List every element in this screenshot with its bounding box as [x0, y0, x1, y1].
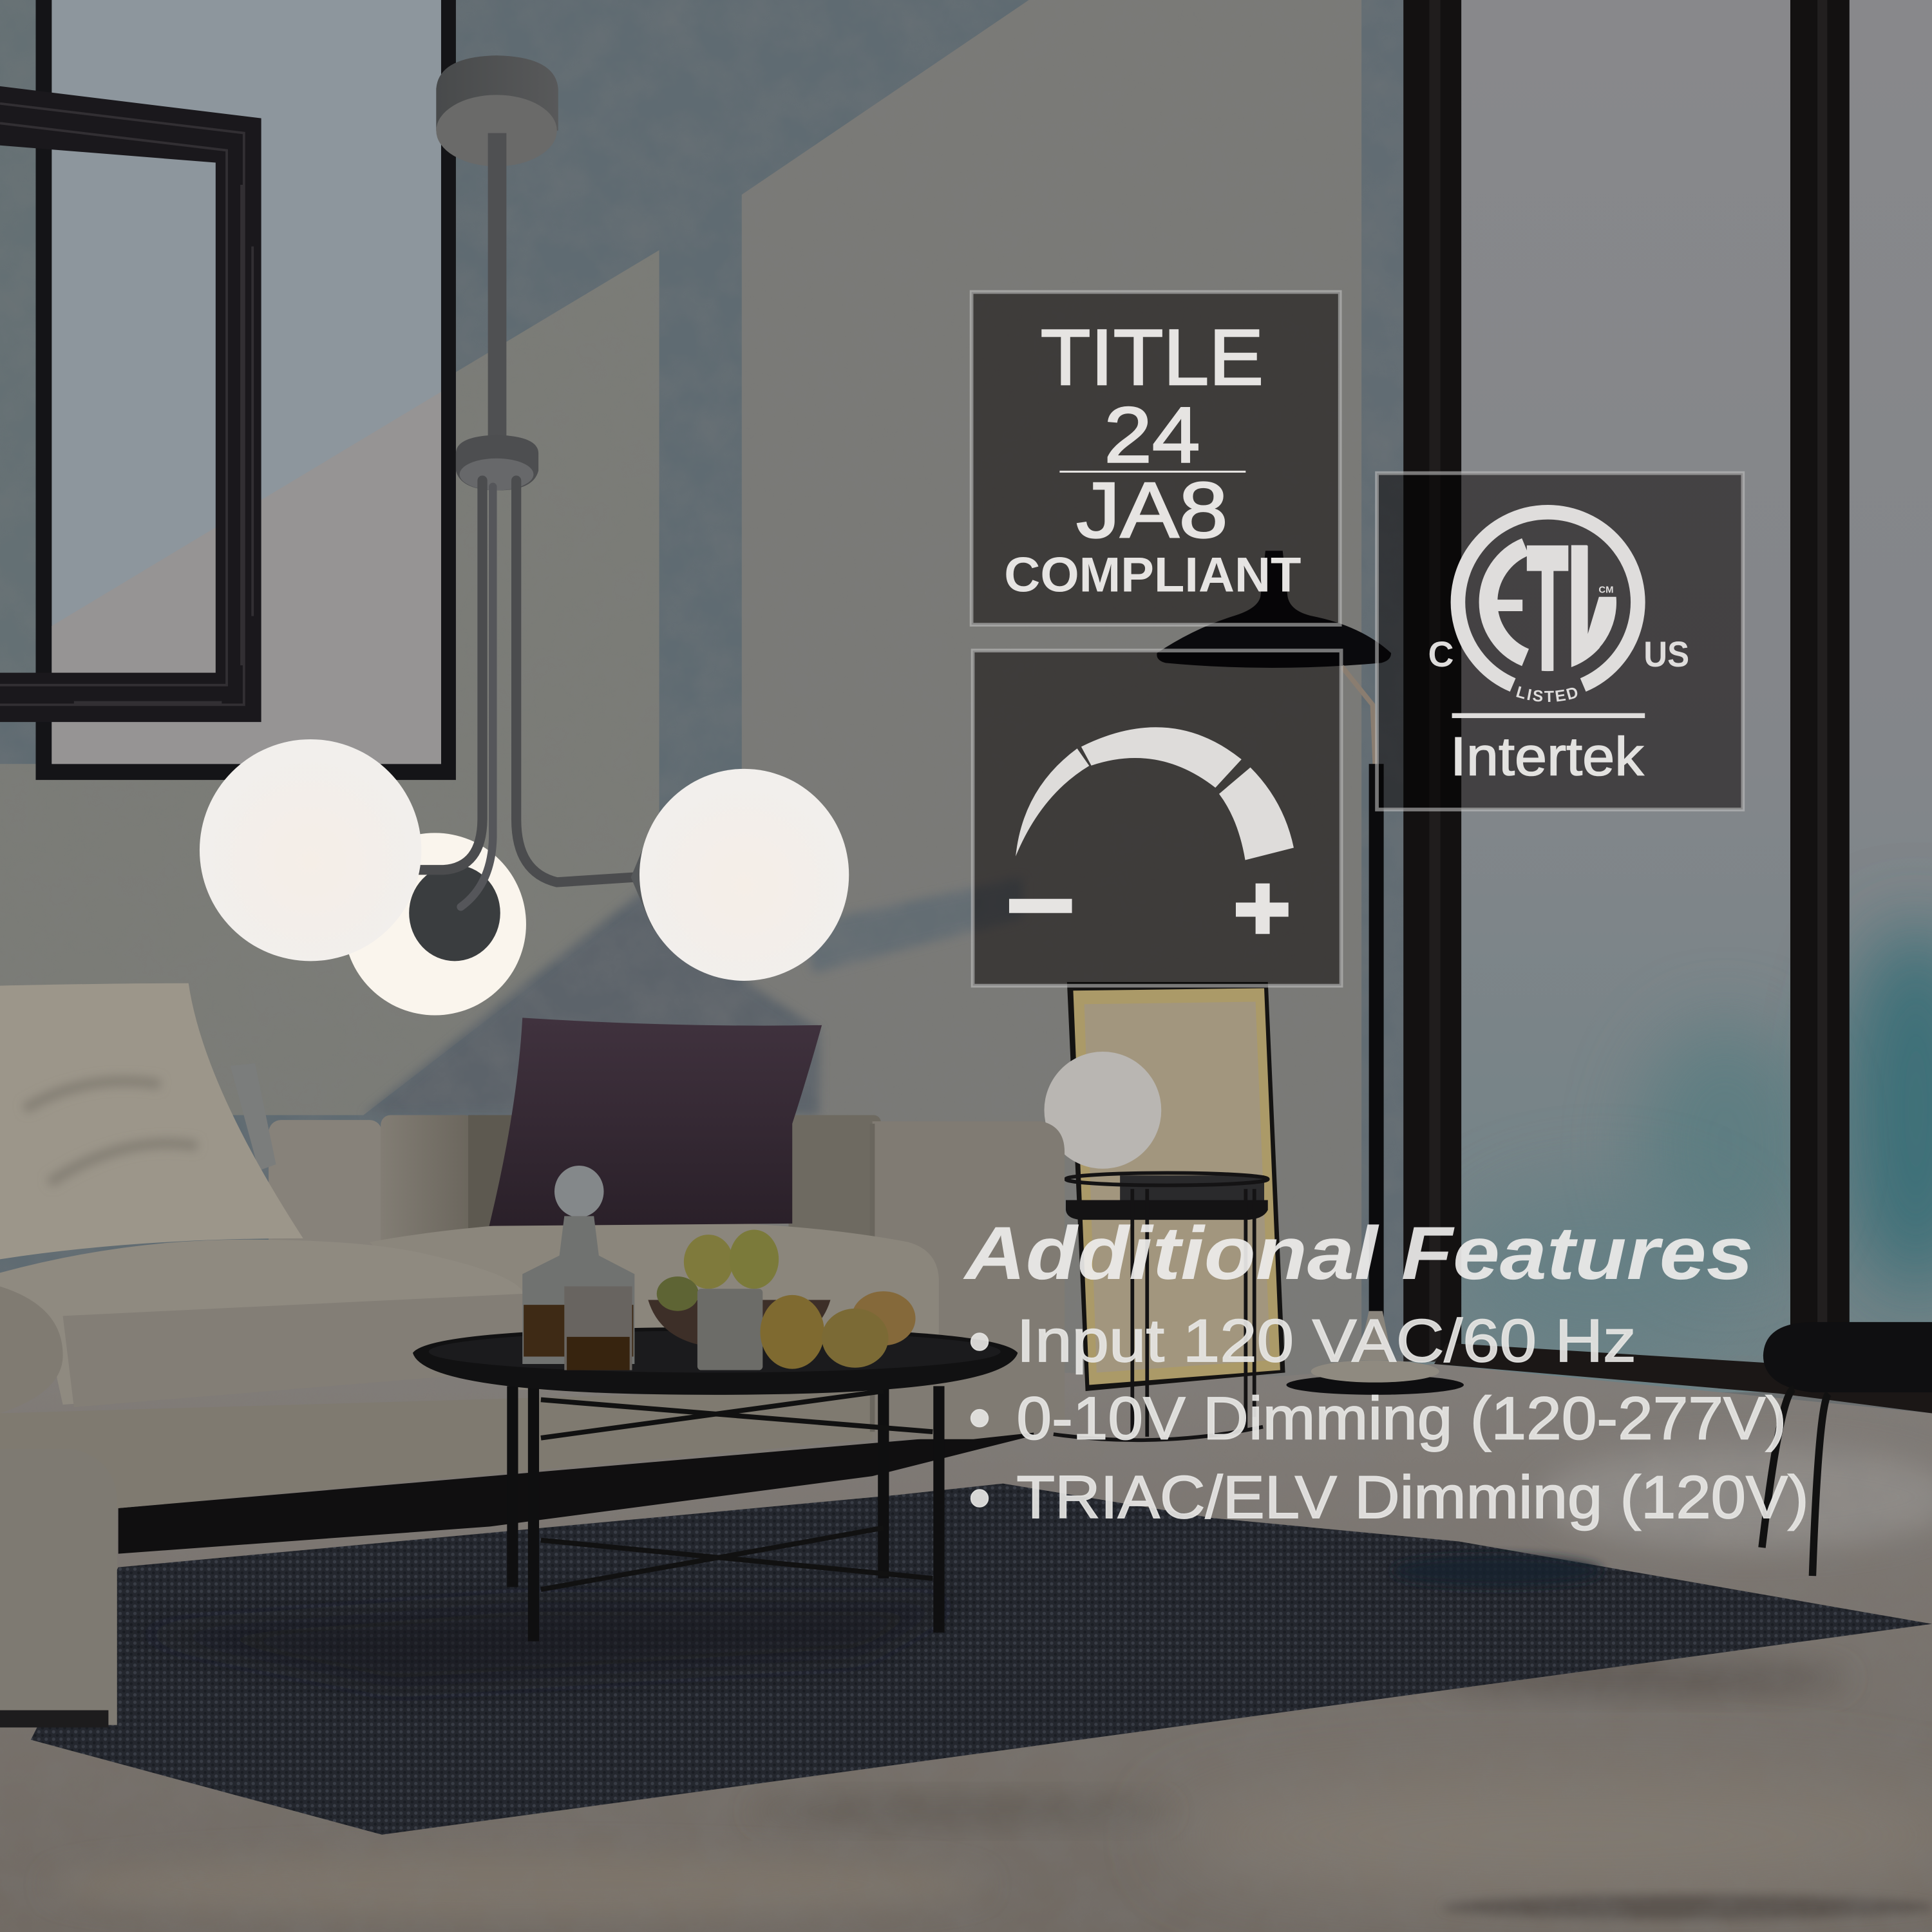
back globe: [344, 833, 526, 1016]
background: window and misty landscape: [1392, 0, 1932, 1392]
right globe socket: [631, 839, 653, 929]
logo letters T and L: T: [1527, 511, 1568, 706]
panel: dimming: [973, 650, 1341, 986]
icon: dimmer arc: [1016, 727, 1294, 860]
heading: JA8: JA8: [1076, 466, 1228, 554]
CM mark: CM: [1598, 584, 1614, 595]
tray: [413, 1327, 1018, 1395]
LISTED: LISTED: [1516, 687, 1578, 702]
logo: c: C: [1428, 634, 1454, 674]
sofa: [0, 983, 1065, 1727]
sofa base: [0, 1386, 986, 1515]
heading: 24: 24: [1104, 390, 1200, 478]
poster on wall: [35, 0, 456, 780]
right globe: [639, 769, 849, 981]
feature: 0-10V: 0-10V Dimming (120-277V): [1016, 1385, 1786, 1452]
left seat cushion: [0, 1240, 524, 1405]
leaning canvas artwork: [1067, 982, 1285, 1391]
large beige pillow: [0, 983, 303, 1259]
ceiling canopy: [436, 55, 558, 166]
background: concrete wall: [0, 0, 1406, 1380]
ottoman: [0, 1449, 117, 1725]
hub: [456, 435, 538, 490]
right seat cushion: [370, 1221, 939, 1390]
window sill: [1434, 1343, 1932, 1414]
sofa shadow: [118, 1429, 1034, 1554]
heading: additional features: Additional Features: [963, 1211, 1754, 1295]
icon: plus: [1236, 884, 1289, 934]
dark wooden picture frame: [0, 86, 261, 722]
logo: ETL mark: E: [1483, 512, 1529, 708]
decanter, glasses and fruit: [522, 1166, 916, 1370]
right arm: [873, 1121, 1065, 1439]
floor lamp: [1157, 551, 1464, 1395]
cushion front shade: [63, 1294, 524, 1407]
logo letters T and L: [1526, 545, 1600, 671]
icon: minus: [1009, 899, 1072, 913]
tubes: [413, 480, 633, 907]
heading: title: TITLE: [1041, 313, 1264, 401]
floor: [0, 1343, 1932, 1932]
stool: [1762, 1322, 1932, 1576]
panel: Title 24 JA8 compliant: [972, 292, 1340, 625]
feature: TRIAC: TRIAC/ELV Dimming (120V): [1016, 1463, 1809, 1531]
logo letters T and L: L: [1564, 507, 1634, 705]
left globe: [200, 739, 421, 961]
purple pillow: [489, 1018, 822, 1226]
chandelier: [200, 55, 849, 1016]
window frames: [1403, 0, 1850, 1370]
feature: input: Input 120 VAC/60 Hz: [1016, 1307, 1636, 1374]
coffee table: [413, 1327, 1018, 1641]
panel: ETL listed: [1375, 471, 1745, 811]
back cushions: [269, 1115, 881, 1256]
thin pillow behind: [231, 1063, 276, 1171]
rug: [31, 1484, 1932, 1835]
side table with globe lamp: [1044, 1052, 1268, 1440]
center dome: [409, 865, 500, 961]
logo: Intertek: Intertek: [1450, 726, 1644, 786]
stem: [488, 133, 506, 439]
text block: feature list: [971, 1307, 1809, 1531]
logo: us: US: [1643, 634, 1689, 674]
logo: ETL mark: [1450, 505, 1645, 702]
heading: compliant: COMPLIANT: [1004, 547, 1301, 602]
